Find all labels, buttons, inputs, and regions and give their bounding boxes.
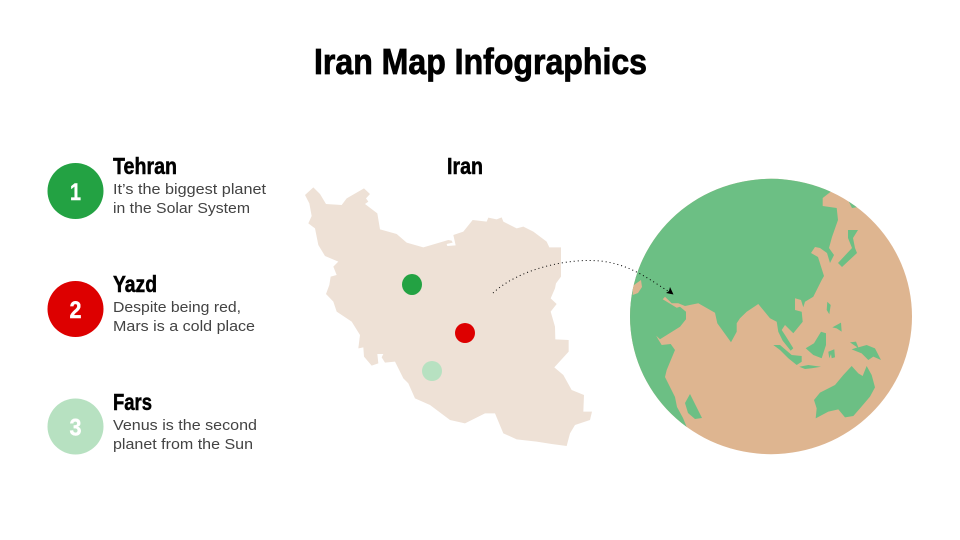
badge 1: 1 xyxy=(70,179,81,206)
globe xyxy=(630,178,912,454)
description: Fars: planet from the Sun xyxy=(113,436,253,453)
description: Tehran xyxy=(113,181,267,217)
badge 1 xyxy=(48,163,104,219)
marker: Fars xyxy=(422,361,442,381)
description: Yazd xyxy=(113,299,255,335)
description: Fars: Venus is the second xyxy=(113,417,257,434)
description: Tehran: in the Solar System xyxy=(113,200,250,217)
arrow: Iran to globe xyxy=(493,260,674,294)
heading: Yazd: Yazd xyxy=(113,271,157,297)
description: Fars xyxy=(113,417,257,453)
heading: Tehran: Tehran xyxy=(113,153,177,179)
badge 2 xyxy=(48,281,104,337)
map of Iran xyxy=(305,187,592,446)
badge 2: 2 xyxy=(70,297,82,324)
badge 3: 3 xyxy=(70,414,82,442)
description: Tehran: It’s the biggest planet xyxy=(113,181,267,198)
marker: Tehran xyxy=(402,274,422,295)
heading: Fars: Fars xyxy=(113,389,152,415)
description: Yazd: Despite being red, xyxy=(113,299,241,316)
marker: Yazd xyxy=(455,323,475,343)
description: Yazd: Mars is a cold place xyxy=(113,318,255,335)
item: Yazd xyxy=(48,271,255,337)
item: Tehran xyxy=(48,153,267,219)
map heading: Iran xyxy=(447,153,483,179)
item: Fars xyxy=(48,389,257,454)
title: Iran Map Infographics xyxy=(314,41,647,82)
badge 3 xyxy=(48,398,104,454)
landmass: upper and left region xyxy=(630,178,838,427)
